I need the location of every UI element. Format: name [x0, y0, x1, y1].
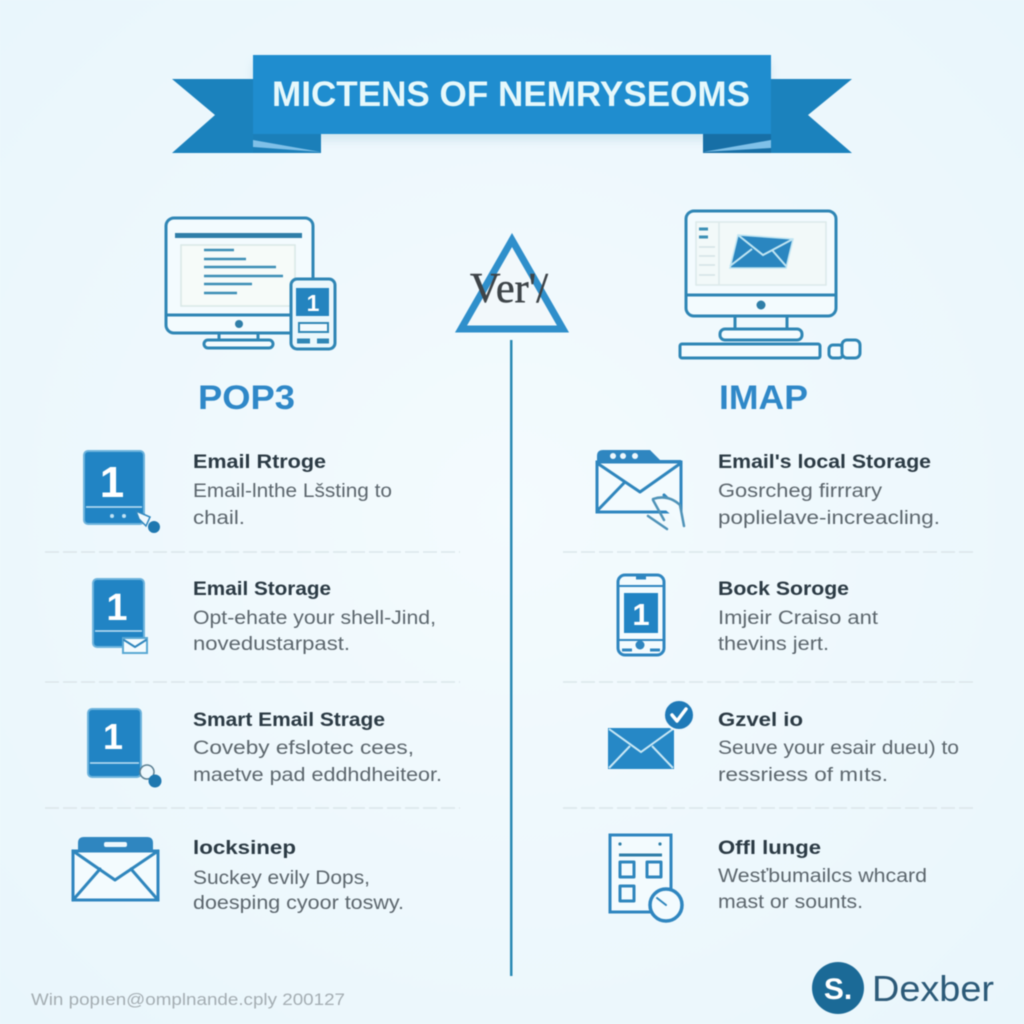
icon: tablet with envelope: 1: [106, 587, 128, 629]
text: item 2: thevins jert.: [718, 634, 829, 655]
text: item 1: Gosrcheg firrrary: [718, 481, 883, 502]
text: item 2: Imjeir Craiso ant: [718, 608, 879, 629]
icon: envelope with hand: [597, 450, 684, 529]
icon: desktop with phone: 1: [307, 290, 320, 316]
icon: envelope with tab: [73, 837, 158, 900]
text: item 3: ressriess of mıts.: [718, 765, 888, 786]
logo: Dexber: Dexber: [872, 968, 994, 1009]
text: item 1: poplielave-increacling.: [718, 508, 940, 529]
text: item 4: locksinep: [193, 838, 296, 859]
title text: MICTENS OF NEMRYSEOMS: [272, 75, 750, 114]
text: item 3: Coveby efslotec cees,: [193, 738, 414, 759]
row: imap item 4: [610, 835, 927, 921]
text: item 4: Wesťbumailcs whcard: [718, 866, 927, 887]
text: item 2: Bock Sorоge: [718, 579, 849, 600]
text: item 1: Email-lnthe Lšsting to: [193, 481, 392, 502]
icon: tablet with envelope: [93, 579, 147, 653]
text: item 4: Offl lunge: [718, 838, 821, 859]
row: pop3 item 3: [88, 709, 442, 788]
text: item 4: [718, 838, 927, 913]
text: item 4: Suckey evily Dops,: [193, 868, 370, 889]
icon: desktop with phone: [166, 218, 335, 349]
text: item 3: Smart Email Strage: [193, 710, 385, 731]
center divider line: [510, 340, 512, 976]
text: item 3: [718, 710, 959, 786]
icon: tablet with bell: 1: [100, 458, 124, 507]
text: item 2: Opt-ehate your shell-Jind,: [193, 608, 436, 629]
text: item 3: maetve pad eddhdheiteor.: [193, 765, 442, 786]
icon: desktop with envelope and keyboard: [680, 211, 860, 358]
logo: Dexber: S.: [824, 973, 852, 1006]
row: imap item 1: [597, 450, 940, 529]
text: item 2: Email Storage: [193, 579, 331, 600]
icon: envelope with check badge: [608, 700, 694, 769]
text: item 2: [193, 579, 436, 655]
text: item 3: Gzvel io: [718, 710, 803, 731]
row: pop3 item 1: [84, 451, 392, 533]
text: item 3: Seuve your esair dueu) to: [718, 738, 959, 759]
row: pop3 item 2: [93, 579, 436, 655]
icon: tablet with lock: [88, 709, 162, 788]
text: item 1: [193, 452, 392, 529]
text: item 1: Email's local Storage: [718, 452, 931, 473]
icon: tablet with bell: [84, 451, 160, 533]
heading: POP3: POP3: [198, 379, 295, 417]
icon: smartphone: 1: [632, 597, 650, 632]
text: item 1: chail.: [193, 508, 245, 529]
footer contact text: Win popıen@omplnande.cply 200127: [31, 990, 345, 1009]
icon: smartphone: [618, 575, 664, 655]
text: item 4: mast or sounts.: [718, 892, 863, 913]
versus triangle: [461, 240, 563, 329]
versus label: Ver'/: [470, 266, 548, 312]
text: item 2: [718, 579, 879, 655]
panel: POP3 column: [73, 218, 442, 914]
text: item 1: [718, 452, 940, 529]
text: item 4: doesping cyoor toswy.: [193, 893, 404, 914]
icon: tablet with lock: 1: [103, 716, 123, 757]
panel: IMAP column: [597, 211, 959, 921]
text: item 3: [193, 710, 442, 786]
logo: Dexber: [812, 962, 994, 1014]
text: item 2: novedustarpast.: [193, 634, 350, 655]
heading: IMAP: IMAP: [719, 379, 808, 417]
row: imap item 2: [618, 575, 879, 655]
row: pop3 item 4: [73, 837, 404, 914]
row: imap item 3: [608, 700, 959, 786]
icon: calendar with clock: [610, 835, 682, 921]
text: item 1: Email Rtroge: [193, 452, 326, 473]
title banner: [172, 55, 852, 153]
text: item 4: [193, 838, 404, 914]
